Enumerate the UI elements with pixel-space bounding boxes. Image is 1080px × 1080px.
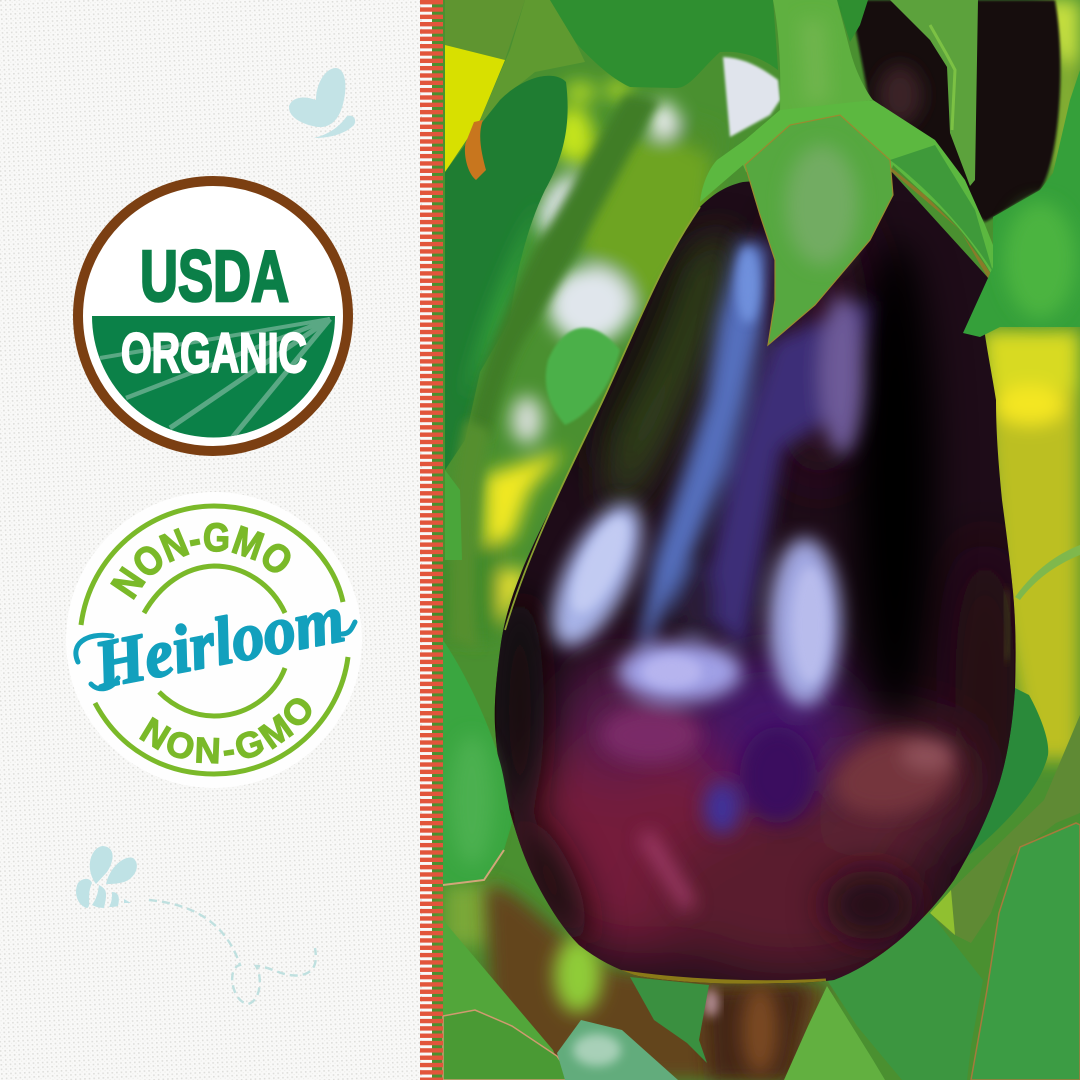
eggplant soft burgundy shading bbox=[510, 200, 1015, 975]
dark second eggplant behind bbox=[850, 0, 1060, 222]
blurred out-of-focus greens bbox=[432, 0, 1080, 945]
seal green field bbox=[85, 316, 345, 441]
icon: pale blue butterfly bbox=[289, 68, 355, 138]
eggplant body bbox=[480, 160, 1040, 1000]
stripe border over photo edge bbox=[432, 0, 443, 1080]
leaf: pale bottom bbox=[557, 1020, 678, 1080]
stamp white backing bbox=[66, 492, 362, 788]
leaf: top-left olive bbox=[445, 0, 525, 60]
thin stem at top right bbox=[890, 0, 978, 186]
eggplant blue and violet highlights bbox=[534, 240, 964, 907]
leaf: lime patch bbox=[445, 45, 505, 172]
decorative stripe border bbox=[420, 0, 432, 1080]
leaf: bottom left upper bbox=[443, 920, 554, 1054]
leaf: lower right dark bbox=[963, 688, 1048, 860]
leaf: bottom middle bbox=[630, 977, 709, 1063]
blurred earth behind the fruit bbox=[485, 885, 830, 1080]
leaf: orange withered tip bbox=[465, 120, 486, 180]
leaf: small bright bbox=[546, 328, 620, 425]
eggplant base colour bbox=[480, 160, 1040, 1000]
leaves and stems behind the fruit bbox=[443, 0, 1080, 1080]
icon: pale blue bee with dashed flight trail bbox=[76, 846, 316, 1004]
leaf: right large overlapping calyx bbox=[963, 70, 1080, 337]
calyx central lobe bbox=[745, 115, 893, 345]
panel: white linen fabric background bbox=[0, 0, 422, 1080]
stem bbox=[773, 0, 873, 112]
photo background foliage bbox=[432, 0, 1080, 1080]
leaf: bottom light bbox=[784, 986, 885, 1080]
eggplant stem and calyx bbox=[700, 0, 995, 345]
calyx right arm bbox=[888, 165, 993, 285]
white sky gap bbox=[723, 57, 780, 137]
leaf: dark large bbox=[445, 76, 568, 470]
stamp rings bbox=[81, 506, 348, 774]
photo: eggplant on the vine bbox=[432, 0, 1080, 1080]
leaf: bottom mid right bbox=[827, 913, 983, 1080]
stamp text: top NON-GMO: NON-GMO bbox=[110, 522, 291, 600]
flight trail bbox=[149, 900, 316, 1004]
bee body and wings bbox=[76, 846, 137, 908]
seal heading: USDA: USDA bbox=[140, 237, 289, 317]
seal heading: ORGANIC: ORGANIC bbox=[121, 321, 307, 384]
stamp script word: Heirloom: Heirloom bbox=[87, 580, 350, 703]
badge: Non-GMO Heirloom stamp bbox=[66, 492, 362, 788]
eggplant dark bands bbox=[496, 221, 937, 954]
badge: USDA Organic seal bbox=[78, 181, 348, 451]
leaf: bottom far right bbox=[971, 823, 1080, 1080]
eggplant sharp glints bbox=[561, 247, 828, 688]
leaf: left lower overlapping fruit bbox=[443, 640, 512, 885]
thin right stem bbox=[1015, 545, 1080, 600]
leaf: top large bbox=[550, 0, 778, 88]
stamp text: bottom NON-GMO: NON-GMO bbox=[139, 698, 312, 764]
leaf: bottom left lower bbox=[443, 1010, 573, 1080]
leaf: bottom far right backing olive bbox=[930, 715, 1080, 943]
eggplant bottom gold rim bbox=[618, 972, 826, 983]
leaf: olive arc bbox=[480, 0, 585, 122]
main stem bbox=[468, 95, 660, 440]
calyx upper collar and arms bbox=[700, 100, 995, 277]
seal ring bbox=[78, 181, 348, 451]
eggplant rim light bbox=[505, 207, 700, 630]
leaf: left middle bbox=[445, 470, 462, 560]
